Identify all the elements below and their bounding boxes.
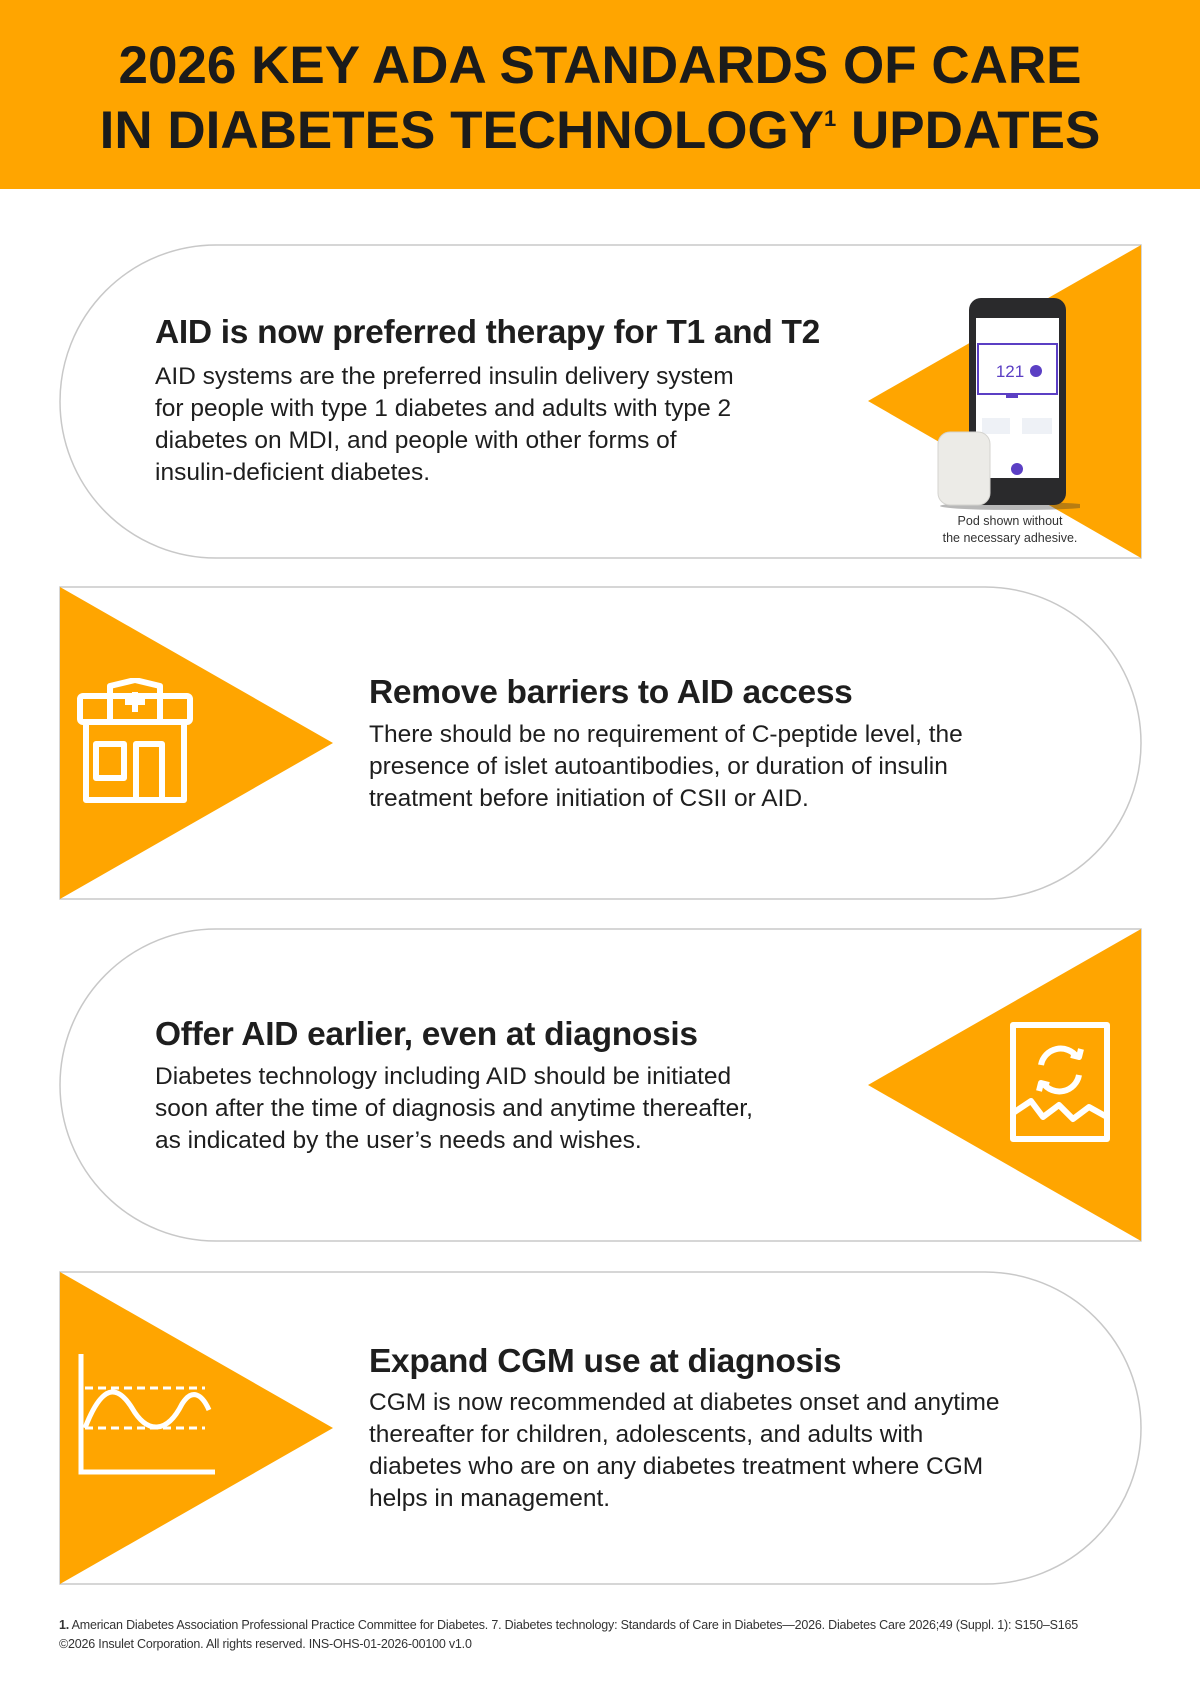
panel: offer AID earlier: [59, 928, 1142, 1242]
title: 2026 KEY ADA STANDARDS OF CARE: [118, 36, 1082, 95]
text block: helps in management.: [369, 1485, 610, 1512]
text block: insulin-deficient diabetes.: [155, 459, 430, 486]
title: [100, 36, 1100, 160]
text block: [369, 1389, 1000, 1512]
heading: Expand CGM use at diagnosis: [369, 1343, 841, 1380]
text block: There should be no requirement of C-peptide level, the: [369, 721, 963, 748]
icon: phone and pod: [938, 298, 1080, 510]
caption: the necessary adhesive.: [943, 531, 1077, 545]
title: IN DIABETES TECHNOLOGY1 UPDATES: [100, 101, 1100, 160]
text block: treatment before initiation of CSII or AID.: [369, 785, 809, 812]
icon: phone and pod: 121: [996, 362, 1024, 381]
text block: AID systems are the preferred insulin delivery system: [155, 363, 734, 390]
text block: [155, 1063, 753, 1154]
text block: for people with type 1 diabetes and adults with type 2: [155, 395, 731, 422]
text block: Diabetes technology including AID should be initiated: [155, 1063, 731, 1090]
text block: presence of islet autoantibodies, or duration of insulin: [369, 753, 948, 780]
text block: soon after the time of diagnosis and anytime thereafter,: [155, 1095, 753, 1122]
header banner: [0, 0, 1200, 189]
panel: AID preferred therapy: [59, 244, 1142, 559]
footer: [59, 1618, 1078, 1651]
text block: [369, 721, 963, 812]
icon: CGM chart: [78, 1354, 215, 1474]
text block: [155, 363, 734, 486]
heading: Offer AID earlier, even at diagnosis: [155, 1016, 698, 1053]
caption: Pod shown without: [958, 514, 1062, 528]
text block: diabetes who are on any diabetes treatment where CGM: [369, 1453, 983, 1480]
footer: ©2026 Insulet Corporation. All rights reserved. INS-OHS-01-2026-00100 v1.0: [59, 1637, 472, 1651]
text block: thereafter for children, adolescents, and adults with: [369, 1421, 923, 1448]
icon: refresh document: [1010, 1022, 1110, 1142]
caption: [942, 514, 1077, 545]
text block: CGM is now recommended at diabetes onset and anytime: [369, 1389, 1000, 1416]
icon: clinic: [77, 678, 193, 803]
panel: expand CGM: [59, 1271, 1142, 1585]
text block: as indicated by the user’s needs and wishes.: [155, 1127, 642, 1154]
footer: 1. American Diabetes Association Professional Practice Committee for Diabetes. 7. Diabetes technology: Standards of Care in Diabetes—2026. Diabetes Care 2026;49 (Suppl. 1): S150–S165: [59, 1618, 1078, 1632]
panel: remove barriers: [59, 586, 1142, 900]
heading: AID is now preferred therapy for T1 and T2: [155, 314, 820, 351]
text block: diabetes on MDI, and people with other forms of: [155, 427, 677, 454]
heading: Remove barriers to AID access: [369, 674, 852, 711]
